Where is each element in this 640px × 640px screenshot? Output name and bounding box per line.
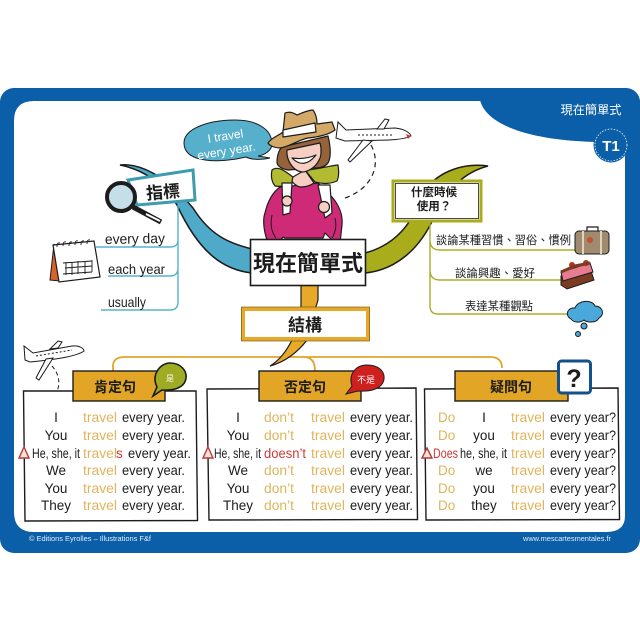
conjugation rows: travel [311,446,345,461]
conjugation rows: travel [511,446,545,461]
conjugation rows: every year. [122,428,185,443]
conjugation rows: travel [311,498,345,513]
conjugation rows: every year. [350,498,413,513]
conjugation rows: every year. [350,463,413,478]
conjugation rows: don’t [264,410,294,425]
tail from structure [270,340,307,366]
usage box: 什麼時候 [411,185,457,199]
icon: thought cloud [567,301,602,336]
conjugation rows: travel [311,410,345,425]
conjugation rows: I [482,410,486,425]
icon: calendar [50,240,100,282]
conjugation rows: They [223,498,253,513]
structure box [242,307,370,341]
heading tab [73,371,165,401]
neck pillow left [271,168,293,186]
indicator words: every day [105,230,165,247]
conjugation rows: s [116,446,123,461]
footer url: www.mescartesmentales.fr [522,536,612,543]
conjugation rows: Do [438,463,455,478]
conjugation rows: They [41,498,71,513]
badge T1: T1 [602,138,620,155]
conjugation rows: you [473,481,495,496]
conjugation rows: travel [511,428,545,443]
header tab [480,100,640,142]
indicator words: usually [108,294,146,310]
icon: left airplane [24,341,84,380]
icon: top airplane [336,119,411,162]
conjugation rows: He, she, it [32,446,80,461]
usage box [393,181,481,221]
heading tab: 疑問句 [490,379,532,395]
yes bubble: 是 [166,374,174,383]
conjugation rows: every year? [550,446,616,461]
conjugation rows: We [228,463,248,478]
heading tab: 肯定句 [94,379,136,395]
warning icon [422,448,432,458]
teal indicator lines [96,205,178,310]
conjugation rows: every year? [550,498,616,513]
conjugation rows: every year? [550,481,616,496]
conjugation rows: don’t [264,481,294,496]
conjugation rows: travel [511,481,545,496]
conjugation rows: you [473,428,495,443]
blue branch [120,165,252,273]
conjugation rows: travel [83,481,117,496]
conjugation rows: don’t [264,498,294,513]
conjugation rows: every year. [350,446,413,461]
conjugation rows: travel [311,463,345,478]
conjugation rows: every year. [122,498,185,513]
conjugation rows: Do [438,428,455,443]
speech bubble: every year. [196,140,256,163]
conjugation rows: You [227,428,249,443]
icon: magnifying glass [107,183,161,222]
conjugation rows: don’t [264,463,294,478]
conjugation rows: he, she, it [460,446,507,461]
stem to structure [301,284,318,310]
conjugation rows [214,410,413,513]
body [264,183,342,247]
conjugation rows: travel [511,410,545,425]
yes bubble [153,363,186,396]
conjugation rows: every year. [122,481,185,496]
conjugation rows [32,410,191,513]
face [287,143,321,172]
conjugation rows: travel [511,498,545,513]
hat band [283,123,316,137]
neck pillow right [305,165,339,183]
heading tab: 否定句 [284,379,326,395]
conjugation rows: every year? [550,428,616,443]
conjugation rows: Do [438,410,455,425]
conjugation rows: travel [83,498,117,513]
character: traveller [264,110,342,247]
conjugation rows: We [46,463,66,478]
dashed line to left airplane [52,366,59,391]
warning icon [203,447,213,458]
heading tab [455,371,568,401]
conjugation rows: travel [311,481,345,496]
no bubble [346,365,384,394]
conjugation rows: every year. [122,410,185,425]
conjugation rows: every year? [550,410,616,425]
arm crease lines [271,215,336,238]
conjugation rows: You [227,481,249,496]
conjugation rows: travel [83,410,117,425]
conjugation rows: You [45,428,67,443]
conjugation rows: Do [438,481,455,496]
header title: 現在簡單式 [560,102,622,117]
main title box: 現在簡單式 [253,251,363,276]
conjugation rows: He, she, it [214,446,261,461]
panel frame [24,391,198,521]
conjugation rows: I [54,410,58,425]
conjugation rows: Does [433,446,458,461]
main title box [250,240,366,286]
hair [277,136,330,170]
conjugation rows: don’t [264,428,294,443]
smile [292,155,316,163]
neck [292,170,314,187]
conjugation rows: every year. [350,410,413,425]
no bubble: 不是 [357,375,375,385]
usage text: 談論某種習慣、習俗、慣例 [436,233,571,247]
conjugation rows: we [474,463,493,478]
conjugation rows: travel [83,446,117,461]
panel frame [207,388,418,520]
conjugation rows: every year. [350,481,413,496]
icon: cake [561,260,594,289]
conjugation rows: doesn’t [264,446,306,461]
conjugation rows: they [471,498,497,513]
hands [282,196,292,206]
panel: question [422,361,620,520]
heading tab [259,371,361,401]
blue frame [0,88,640,553]
usage box: 使用？ [417,199,451,213]
warning icon [19,447,29,458]
usage text: 談論興趣、愛好 [455,266,535,280]
hat [268,110,335,148]
indicator words [105,230,165,310]
structure box: 結構 [288,315,322,335]
panel: negative [203,365,418,520]
panel frame [424,388,620,520]
usage text: 表達某種觀點 [465,299,533,313]
speech bubble [184,120,272,163]
conjugation rows: every year. [122,463,185,478]
icon: suitcase [575,227,609,254]
conjugation rows: travel [83,463,117,478]
conjugation rows: I [236,410,240,425]
footer credit: © Editions Eyrolles – Illustrations F&f [29,535,151,543]
conjugation rows: every year? [550,463,616,478]
conjugation rows: every year. [128,446,191,461]
question mark icon: ? [566,365,582,393]
dashed flight path [342,145,375,199]
indicator words: each year [108,261,165,277]
usage text [436,233,571,313]
panel: affirmative [19,363,198,521]
conjugation rows: Do [438,498,455,513]
conjugation rows: travel [83,428,117,443]
conjugation rows: every year. [350,428,413,443]
conjugation rows: travel [311,428,345,443]
indicator box [128,170,195,205]
conjugation rows [433,410,616,513]
question mark icon [558,361,590,393]
olive usage lines [430,222,575,314]
speech bubble: I travel [206,126,244,146]
orange connector lines [113,357,502,371]
conjugation rows: travel [511,463,545,478]
badge T1 [594,128,628,162]
olive branch [365,165,488,273]
indicator box: 指標 [145,182,181,203]
straps [282,183,332,218]
conjugation rows: You [45,481,67,496]
